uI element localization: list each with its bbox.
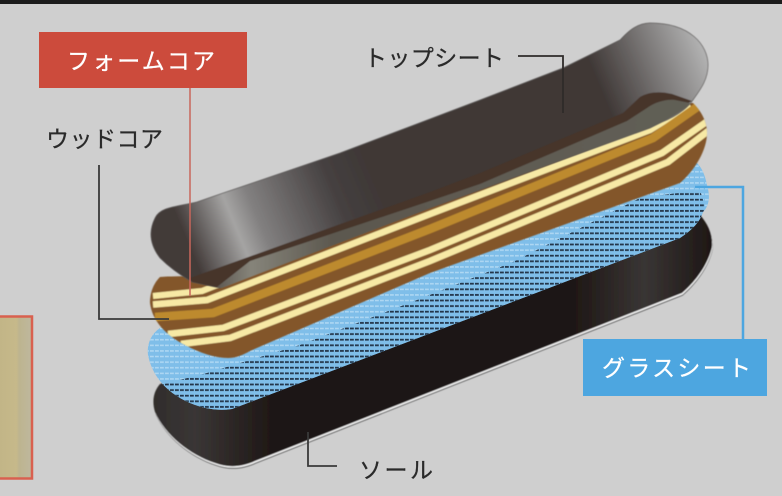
label: sole: ソール	[359, 457, 433, 483]
sheet lower brown band	[190, 92, 692, 288]
label: top sheet: トップシート	[364, 45, 504, 71]
leader: glass sheet	[695, 187, 743, 340]
label: glass sheet	[583, 339, 767, 396]
leader: wood core	[99, 165, 169, 319]
wood core stripes	[153, 105, 712, 344]
top dark bar	[0, 0, 782, 4]
label: wood core: ウッドコア	[46, 126, 163, 152]
layer: sole	[153, 215, 713, 469]
layer: glass sheet	[148, 163, 709, 410]
layer: top sheet	[151, 23, 708, 288]
label: foam core: フォームコア	[67, 48, 215, 74]
sheet lower grey band	[217, 100, 690, 288]
label: foam core	[39, 32, 247, 88]
leader: top sheet	[518, 56, 563, 113]
label: glass sheet: グラスシート	[602, 355, 751, 381]
layer: wood core	[150, 100, 712, 358]
leader: foam core	[189, 88, 191, 296]
leader: sole	[308, 432, 337, 466]
wood photo swatch cropped at left	[0, 316, 32, 478]
